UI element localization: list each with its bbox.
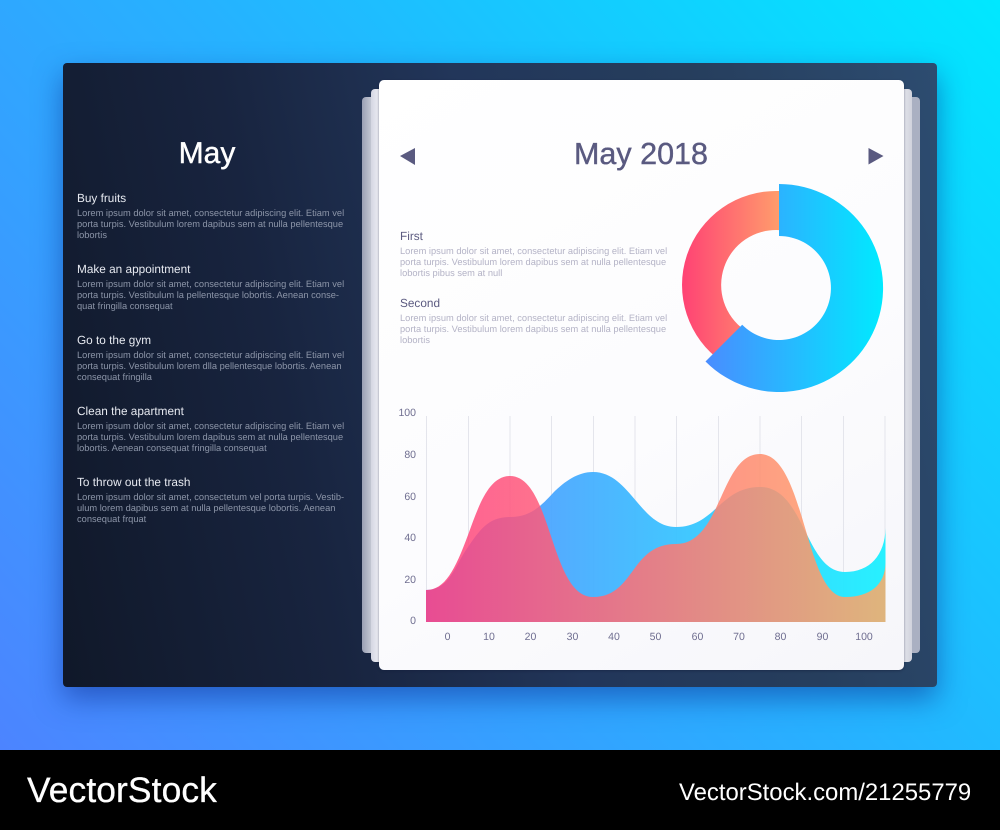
task: go to the gym: Go to the gym — [77, 333, 151, 347]
y axis labels: 100 — [398, 407, 416, 419]
task: throw out the trash: Lorem ipsum dolor sit amet, consectetum vel porta turpis. Vestib- — [77, 492, 344, 502]
task: go to the gym: porta turpis. Vestibulum lorem dlla pellentesque lobortis. Aenean — [77, 361, 342, 371]
task: make an appointment — [77, 262, 344, 311]
dark panel: tasks — [63, 63, 937, 687]
task: make an appointment: porta turpis. Vestibulum la pellentesque lobortis. Aenean conse- — [77, 290, 339, 300]
text: first: First — [400, 229, 423, 243]
task: clean the apartment: lobortis. Aenean consequat fringilla consequat — [77, 443, 267, 453]
y axis labels: 60 — [404, 491, 416, 503]
task: go to the gym: consequat fringilla — [77, 372, 152, 382]
text: first — [400, 229, 667, 278]
text: second: lobortis — [400, 335, 430, 345]
x axis labels: 90 — [817, 631, 828, 643]
text: second: Second — [400, 296, 440, 310]
text: first: lobortis pibus sem at null — [400, 268, 502, 278]
task: throw out the trash: ulum lorem dapibus sem at nulla pellentesque lobortis. Aenean — [77, 503, 335, 513]
task list — [77, 191, 344, 524]
task: throw out the trash: To throw out the trash — [77, 475, 190, 489]
x axis labels: 0 — [445, 631, 451, 643]
y axis labels: 40 — [404, 532, 416, 544]
chart grid — [426, 416, 885, 622]
x axis labels: 70 — [733, 631, 745, 643]
task: go to the gym: Lorem ipsum dolor sit amet, consectetur adipiscing elit. Etiam vel — [77, 350, 344, 360]
y axis labels: 80 — [404, 449, 416, 461]
task: make an appointment: Make an appointment — [77, 262, 190, 276]
task: clean the apartment — [77, 404, 344, 453]
footer bar — [0, 750, 1000, 830]
area series: pink — [426, 454, 886, 622]
text: second — [400, 296, 667, 345]
text: first: Lorem ipsum dolor sit amet, consectetur adipiscing elit. Etiam vel — [400, 246, 667, 256]
x axis labels: 60 — [692, 631, 703, 643]
area series: blue — [426, 472, 886, 622]
x axis labels — [445, 631, 873, 643]
task: buy fruits: Buy fruits — [77, 191, 126, 205]
icon: previous arrow — [400, 148, 415, 165]
x axis labels: 30 — [567, 631, 578, 643]
logo: VectorStock: VectorStock — [27, 770, 217, 810]
front sheet — [379, 80, 904, 670]
y axis labels — [398, 407, 416, 627]
task: buy fruits — [77, 191, 344, 240]
back sheet — [362, 97, 920, 653]
heading: May 2018: May 2018 — [574, 137, 708, 171]
area chart — [398, 407, 886, 643]
text: first: porta turpis. Vestibulum lorem dapibus sem at nulla pellentesque — [400, 257, 666, 267]
x axis labels: 20 — [525, 631, 536, 643]
icon: next arrow — [868, 148, 884, 164]
donut segment: pink — [682, 191, 779, 362]
x axis labels: 10 — [483, 631, 495, 643]
donut segment: blue — [706, 184, 883, 392]
task: clean the apartment: Clean the apartment — [77, 404, 184, 418]
task: throw out the trash: consequat frquat — [77, 514, 146, 524]
task: clean the apartment: Lorem ipsum dolor sit amet, consectetur adipiscing elit. Etiam vel — [77, 421, 344, 431]
x axis labels: 50 — [650, 631, 661, 643]
task: make an appointment: quat fringilla consequat — [77, 301, 173, 311]
footer url: VectorStock.com/21255779 — [679, 779, 971, 806]
task: go to the gym — [77, 333, 344, 382]
y axis labels: 0 — [410, 615, 416, 627]
task: buy fruits: Lorem ipsum dolor sit amet, consectetur adipiscing elit. Etiam vel — [77, 208, 344, 218]
task: clean the apartment: porta turpis. Vestibulum lorem dapibus sem at nulla pellentesque — [77, 432, 343, 442]
y axis labels: 20 — [404, 574, 416, 586]
task: buy fruits: porta turpis. Vestibulum lorem dapibus sem at nulla pellentesque — [77, 219, 343, 229]
text: second: Lorem ipsum dolor sit amet, consectetur adipiscing elit. Etiam vel — [400, 313, 667, 323]
donut chart — [682, 184, 883, 392]
task: buy fruits: lobortis — [77, 230, 107, 240]
text: second: porta turpis. Vestibulum lorem dapibus sem at nulla pellentesque — [400, 324, 666, 334]
heading: May: May — [179, 137, 235, 170]
middle sheet — [371, 89, 912, 662]
task: make an appointment: Lorem ipsum dolor sit amet, consectetur adipiscing elit. Etiam vel — [77, 279, 344, 289]
x axis labels: 100 — [855, 631, 873, 643]
task: throw out the trash — [77, 475, 344, 524]
x axis labels: 40 — [608, 631, 620, 643]
x axis labels: 80 — [775, 631, 786, 643]
